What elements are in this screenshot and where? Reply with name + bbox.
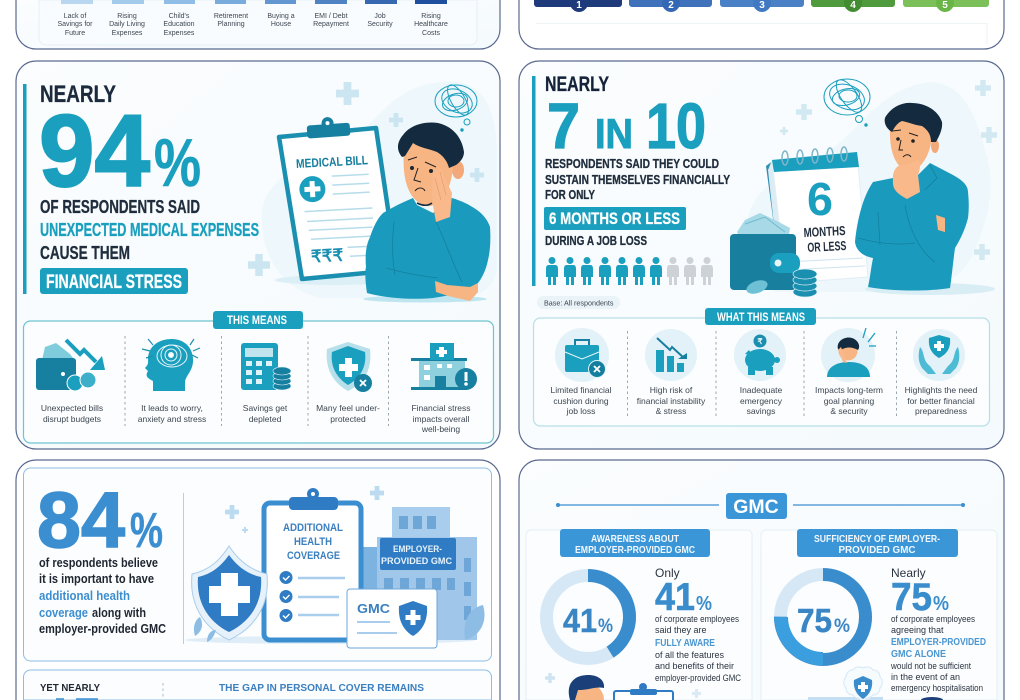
icon: calendar 6 months: 6	[807, 173, 833, 225]
tab heading: AWARENESS ABOUT	[591, 534, 679, 545]
illustration: shield badge with device (cropped)	[808, 667, 943, 700]
headline stat: FINANCIAL STRESS	[46, 272, 182, 293]
bar labels: Job	[374, 13, 386, 20]
card: gap in personal cover	[24, 670, 492, 700]
headline stat: OF RESPONDENTS SAID	[40, 197, 200, 217]
means labels: protected	[330, 414, 366, 424]
accent bar	[532, 76, 536, 286]
headline stat: NEARLY	[545, 73, 609, 96]
headline stat	[37, 475, 166, 636]
tab heading: THIS MEANS	[227, 315, 287, 327]
icon: medical bill clipboard	[279, 116, 397, 279]
stat text: 75	[891, 576, 932, 619]
icon: large shield	[192, 546, 267, 642]
bar labels: Future	[65, 30, 85, 37]
icon: clipboard additional health coverage: HEALTH	[294, 536, 332, 548]
stat text: Nearly	[891, 566, 926, 580]
icon: piggy bank with rupee coin	[745, 334, 780, 375]
means labels: disrupt budgets	[43, 414, 101, 424]
icon: briefcase with cross	[565, 340, 606, 378]
bar labels: House	[271, 21, 291, 28]
means labels	[551, 385, 978, 416]
icon: falling bar chart	[656, 338, 687, 372]
subpanel: sufficiency	[761, 529, 997, 700]
man head	[931, 139, 939, 153]
illustration: worried man with medical bill	[248, 82, 497, 302]
icon: calendar 6 months: MONTHS	[803, 223, 846, 240]
icon: piggy bank with rupee coin: ₹	[757, 337, 763, 346]
means labels: goal planning	[824, 396, 875, 406]
stat text	[655, 566, 741, 683]
bar labels: Lack of	[64, 13, 86, 20]
title: GMC	[733, 496, 779, 518]
illustration: shield, clipboard, building	[185, 486, 484, 648]
means labels: impacts overall	[413, 414, 469, 424]
means labels: Unexpected bills	[41, 403, 103, 413]
means labels: & stress	[656, 406, 686, 416]
means labels: depleted	[249, 414, 282, 424]
headline stat: 7	[547, 90, 580, 162]
donut chart 41%: 41	[563, 602, 597, 639]
icon: head with anxious thoughts	[142, 339, 200, 391]
icon: building: PROVIDED GMC	[381, 556, 452, 567]
base note: Base: All respondents	[544, 298, 614, 308]
stat text: 41	[655, 576, 695, 619]
card: gap in personal cover: YET NEARLY	[40, 682, 100, 694]
headline stat	[39, 81, 259, 294]
icon: calendar 6 months: OR LESS	[807, 238, 847, 255]
pictogram: 7 of 10 people	[546, 257, 713, 285]
means labels: savings	[747, 406, 775, 416]
title	[556, 493, 965, 519]
headline stat: of respondents believe	[39, 556, 158, 570]
stat text: FULLY AWARE	[655, 638, 715, 649]
donut chart 75%	[774, 574, 866, 666]
icon circles	[555, 328, 965, 382]
icon: GMC card: GMC	[357, 601, 391, 616]
means labels: High risk of	[650, 385, 693, 395]
headline stat: along with	[92, 606, 146, 620]
headline stat: employer-provided GMC	[39, 622, 166, 636]
icon: medical bill clipboard: ₹₹₹	[310, 246, 344, 266]
step bars	[534, 0, 989, 12]
bar labels: Expenses	[164, 30, 195, 37]
icon: shield with cross	[327, 342, 372, 392]
bar labels: Savings for	[57, 21, 93, 28]
bar labels: Costs	[422, 30, 440, 37]
headline stat: SUSTAIN THEMSELVES FINANCIALLY	[545, 172, 730, 187]
icon: wallet with falling arrow	[36, 340, 105, 391]
bar labels: Rising	[117, 13, 137, 20]
headline stat: %	[130, 504, 163, 558]
tab heading	[797, 529, 958, 557]
bar labels: Planning	[217, 21, 245, 28]
panel: top-right numbered steps (cropped)	[519, 0, 1004, 49]
stat text: and benefits of their	[655, 661, 734, 671]
icon: building: EMPLOYER-	[393, 544, 442, 555]
icon: calculator and coins	[241, 343, 291, 390]
means labels: Limited financial	[551, 385, 612, 395]
headline stat: coverage	[39, 606, 88, 620]
stat text: %	[933, 593, 949, 615]
tab heading	[213, 311, 303, 329]
stat text: employer-provided GMC	[655, 673, 741, 683]
bar chart bases	[61, 0, 447, 4]
stat text: %	[696, 593, 712, 615]
base note	[537, 296, 620, 309]
means labels	[41, 403, 471, 434]
icon: clipboard additional health coverage: COVERAGE	[287, 550, 340, 562]
tab heading: WHAT THIS MEANS	[717, 312, 805, 324]
means labels: well-being	[421, 424, 460, 434]
means labels: Savings get	[243, 403, 288, 413]
step bars: 3	[759, 0, 765, 11]
headline stat: %	[154, 125, 201, 201]
stat text: EMPLOYER-PROVIDED	[891, 637, 986, 648]
headline stat: 6 MONTHS OR LESS	[549, 209, 680, 228]
stat text: of all the features	[655, 650, 725, 660]
bar labels: Healthcare	[414, 21, 448, 28]
stat text: of corporate employees	[891, 614, 975, 624]
bar labels: Buying a	[267, 13, 295, 20]
bar labels	[57, 13, 448, 37]
tab heading: PROVIDED GMC	[838, 545, 916, 556]
stat text: said they are	[655, 625, 707, 635]
headline stat	[544, 73, 730, 248]
panel: what this means	[534, 308, 990, 426]
bar labels: Security	[367, 21, 393, 28]
means labels: Many feel under-	[316, 403, 380, 413]
tab heading	[705, 308, 816, 325]
tab heading	[560, 529, 710, 557]
means labels: anxiety and stress	[138, 414, 206, 424]
stat text	[890, 566, 986, 693]
means labels: Inadequate	[740, 385, 783, 395]
headline stat: RESPONDENTS SAID THEY COULD	[545, 156, 719, 171]
icon: thought scribble	[435, 82, 477, 131]
accent bar	[23, 84, 26, 294]
stat text: of corporate employees	[655, 614, 739, 624]
stat text: emergency hospitalisation	[891, 683, 983, 693]
headline stat: UNEXPECTED MEDICAL EXPENSES	[40, 220, 259, 240]
means labels: cushion during	[553, 396, 609, 406]
bar labels: Daily Living	[109, 21, 145, 28]
headline stat: NEARLY	[40, 81, 116, 108]
donut chart 75%: 75	[797, 602, 832, 639]
icon: thought scribble	[824, 76, 870, 126]
headline stat: 94	[39, 94, 150, 208]
step bars: 1	[576, 0, 582, 11]
card: gap in personal cover: THE GAP IN PERSONAL COVER REMAINS	[219, 682, 424, 694]
subpanel: awareness	[526, 529, 752, 700]
headline stat: additional health	[39, 589, 130, 603]
panel: top-left savings concerns chart (cropped)	[16, 0, 500, 49]
inner card	[24, 468, 492, 661]
stat text: would not be sufficient	[890, 661, 971, 671]
step bars: 4	[850, 0, 856, 11]
tab heading: SUFFICIENCY OF EMPLOYER-	[814, 534, 940, 545]
icon: hospital with alert	[411, 343, 477, 390]
bar labels: EMI / Debt	[314, 13, 348, 20]
headline stat: FOR ONLY	[545, 187, 595, 202]
headline stat: 10	[646, 90, 706, 162]
stat text: Only	[655, 566, 680, 580]
panel: additional coverage 84%	[16, 460, 500, 700]
panel: this means	[24, 311, 494, 443]
bar labels: Child's	[169, 13, 190, 20]
icon: wallet with cash and coins	[730, 213, 817, 297]
means labels: emergency	[740, 396, 783, 406]
means labels: & security	[830, 406, 868, 416]
bar labels: Rising	[421, 13, 441, 20]
icon: medical bill clipboard: MEDICAL BILL	[296, 153, 369, 171]
bar labels: Expenses	[112, 30, 143, 37]
icon: clipboard additional health coverage: ADDITIONAL	[283, 522, 343, 534]
headline stat: CAUSE THEM	[40, 243, 130, 263]
step bars: 2	[668, 0, 674, 11]
panel: 7 in 10 job loss	[519, 61, 1004, 449]
means labels: Financial stress	[411, 403, 471, 413]
stat text: GMC ALONE	[891, 649, 946, 660]
donut chart 75%: %	[834, 616, 850, 637]
man body	[855, 163, 969, 291]
stat text: agreeing that	[891, 625, 944, 635]
tab heading: EMPLOYER-PROVIDED GMC	[575, 545, 695, 556]
icon: GMC card	[347, 589, 437, 648]
man head	[452, 161, 464, 179]
illustration: worried man with calendar and wallet	[730, 76, 997, 297]
means labels: preparedness	[915, 406, 967, 416]
means labels: Impacts long-term	[815, 385, 883, 395]
man body	[365, 198, 490, 299]
bar labels: Education	[163, 21, 195, 28]
donut chart 41%	[546, 576, 630, 658]
means labels: It leads to worry,	[141, 403, 203, 413]
headline stat: 84	[37, 475, 125, 564]
headline stat: IN	[595, 110, 633, 157]
icon: calendar 6 months	[766, 147, 868, 286]
means labels: financial instability	[637, 396, 706, 406]
means labels: job loss	[566, 406, 595, 416]
bar labels: Repayment	[313, 21, 349, 28]
icon: clipboard additional health coverage	[264, 488, 361, 640]
icon: building	[363, 507, 484, 640]
panel: medical expenses stress	[16, 61, 500, 449]
donut chart 41%: %	[598, 616, 613, 637]
bar labels: Retirement	[214, 13, 248, 20]
means labels: for better financial	[907, 396, 975, 406]
icon: stressed person	[827, 328, 876, 377]
illustration: person with clipboard (cropped)	[545, 673, 701, 700]
icon: hands holding shield	[919, 335, 959, 374]
headline stat: it is important to have	[39, 572, 154, 586]
headline stat: DURING A JOB LOSS	[545, 233, 647, 248]
panel: GMC awareness and sufficiency	[519, 460, 1004, 700]
stat text: in the event of an	[891, 672, 960, 682]
step bars: 5	[942, 0, 948, 11]
means labels: Highlights the need	[905, 385, 978, 395]
